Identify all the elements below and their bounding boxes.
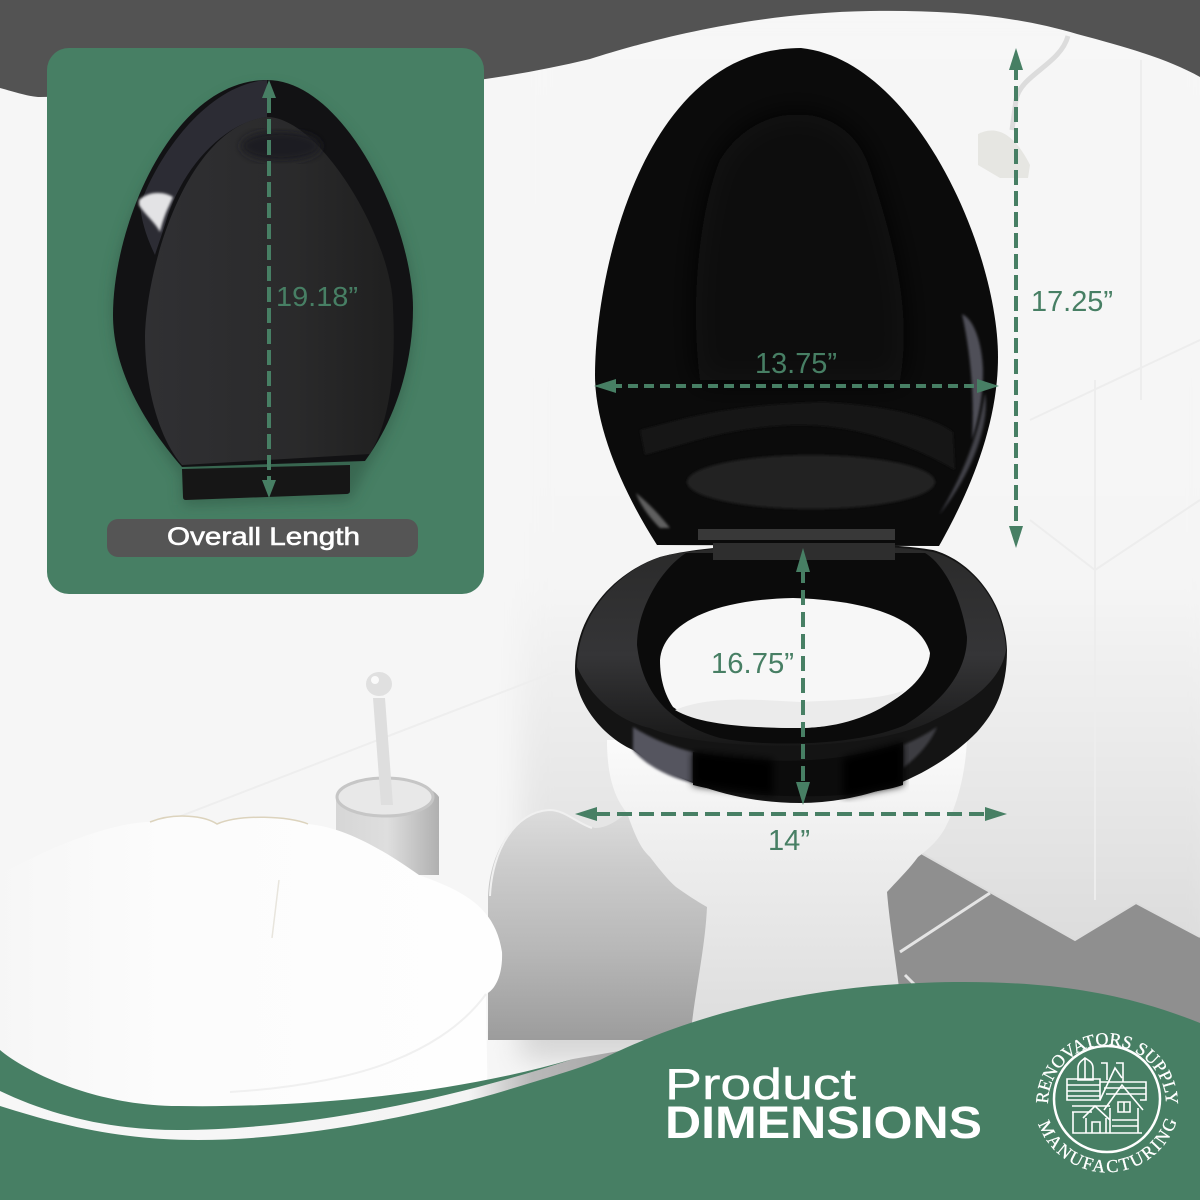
label: 16.75 inches: 16.75”	[711, 648, 794, 680]
arrow: lid height 17.25 inches	[1009, 48, 1023, 548]
left wall tile lines	[28, 671, 557, 875]
label: 17.25 inches: 17.25”	[1031, 286, 1113, 318]
logo: Renovators Supply Manufacturing	[1036, 1033, 1178, 1173]
wall pipe and valve	[978, 36, 1068, 178]
heading: product dimensions: Product	[665, 1060, 856, 1109]
round wall fixture with shaded wall	[488, 810, 720, 1040]
logo house	[1067, 1058, 1146, 1133]
bottom green crescent	[0, 1050, 573, 1130]
lid reflections	[636, 114, 986, 528]
glossy highlight	[139, 193, 173, 232]
heading: product dimensions	[665, 1060, 982, 1148]
arrow: overall length	[262, 80, 276, 498]
caption pill	[107, 519, 418, 557]
bottom white swoosh band	[0, 1050, 625, 1160]
bowl opening	[660, 598, 930, 728]
logo ring text: RENOVATORS SUPPLY	[1036, 1033, 1178, 1104]
inner panel	[145, 117, 394, 465]
logo ring text lower: MANUFACTURING	[1038, 1118, 1176, 1173]
panel: overall length	[47, 48, 484, 594]
seat front highlights	[633, 727, 937, 797]
toilet brush and holder	[336, 672, 439, 875]
arrow: lid width 13.75 inches	[594, 379, 999, 393]
dark reflection	[241, 131, 321, 161]
arrow: overall width 14 inches	[575, 807, 1007, 821]
top grey wave	[0, 0, 1200, 97]
bottom green banner	[0, 982, 1200, 1200]
seat inner recess	[637, 553, 967, 744]
hinge block	[713, 543, 895, 560]
bowl water line	[675, 690, 905, 728]
open toilet lid	[595, 48, 998, 546]
arrow: seat length 16.75 inches	[796, 548, 810, 805]
caption pill: Overall Length	[167, 523, 360, 551]
hinge plate	[182, 465, 350, 500]
label: 19.18 inches: 19.18”	[276, 281, 358, 312]
fixture rim highlight	[490, 810, 592, 896]
seat shadow	[113, 88, 413, 505]
seat top surface	[577, 545, 1006, 746]
heading: product dimensions: DIMENSIONS	[665, 1097, 982, 1148]
white foreground bin	[0, 816, 502, 1120]
floor tiles	[860, 853, 1200, 1040]
toilet bowl	[607, 740, 967, 1040]
right tiled wall	[520, 0, 1200, 1060]
label: 14 inches: 14”	[768, 825, 810, 857]
upper rim sheen	[140, 80, 267, 255]
label: 13.75 inches: 13.75”	[755, 348, 837, 380]
closed toilet seat	[113, 80, 413, 500]
toilet seat ring	[575, 543, 1007, 803]
lid hinge bar	[698, 529, 895, 540]
